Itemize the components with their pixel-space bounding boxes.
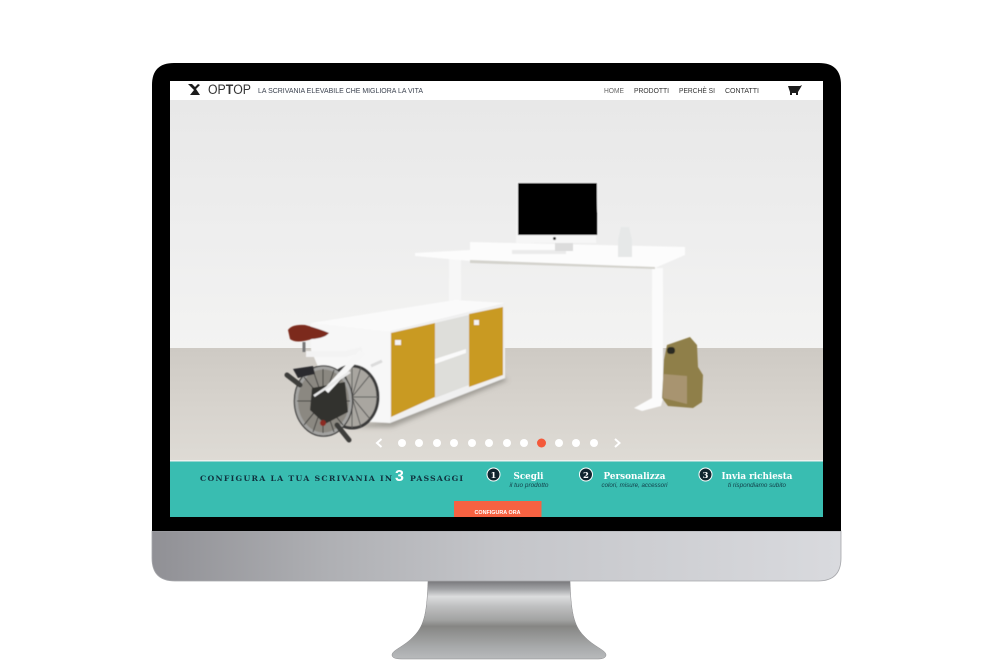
step 3: 3 <box>703 471 709 481</box>
computer monitor <box>516 182 598 251</box>
bag <box>662 337 703 408</box>
frame <box>306 350 362 354</box>
band heading: 3 <box>395 468 404 485</box>
tagline: LA SCRIVANIA ELEVABILE CHE MIGLIORA LA VITA <box>258 86 424 95</box>
hero photograph <box>170 100 823 460</box>
step 3 <box>699 468 792 489</box>
menu items: HOME <box>604 86 624 95</box>
button: configura ora <box>454 501 542 517</box>
menu items <box>604 86 759 95</box>
logo wordmark: OPTOP <box>208 82 251 97</box>
photo subjects <box>287 182 703 440</box>
floor <box>170 348 823 460</box>
hub and gears <box>310 382 348 424</box>
front wheel <box>294 366 352 436</box>
step 1: il tuo prodotto <box>510 483 549 489</box>
handlebar grips <box>287 375 349 440</box>
step 1: 1 <box>491 471 497 481</box>
folded bicycle <box>287 325 382 440</box>
water bottle <box>618 227 632 257</box>
monitor chin <box>152 531 841 581</box>
step 2 <box>580 468 668 489</box>
step 2: 2 <box>583 471 589 481</box>
rear wheel <box>326 366 378 428</box>
website screen <box>170 81 823 517</box>
carousel previous arrow <box>377 439 382 447</box>
carousel next arrow <box>615 439 620 447</box>
menu items: PRODOTTI <box>634 86 669 95</box>
desk <box>415 242 685 411</box>
band heading <box>200 468 463 485</box>
step 3: ti rispondiamo subito <box>728 483 787 489</box>
monitor stand <box>392 581 606 659</box>
step 1 <box>487 468 549 489</box>
step 2: colori, misure, accessori <box>602 483 668 489</box>
carousel dots <box>398 438 598 448</box>
button: configura ora: CONFIGURA ORA <box>474 510 521 516</box>
monitor body <box>152 63 841 581</box>
cabinet shadow <box>345 376 508 427</box>
menu items: CONTATTI <box>725 86 759 95</box>
cabinet <box>311 300 505 423</box>
saddle <box>288 325 329 342</box>
wall <box>170 100 823 349</box>
monitor bezel <box>152 63 841 531</box>
step 3: Invia richiesta <box>722 471 792 482</box>
band heading: CONFIGURA LA TUA SCRIVANIA IN <box>200 474 392 483</box>
icon: cart <box>788 85 802 95</box>
step 2: Personalizza <box>604 471 666 482</box>
navigation bar <box>170 81 823 100</box>
menu items: PERCHÈ SI <box>679 86 715 95</box>
logo icon <box>188 84 200 95</box>
configurator band <box>170 460 823 517</box>
step 1: Scegli <box>514 471 544 482</box>
band heading: PASSAGGI <box>410 474 463 483</box>
